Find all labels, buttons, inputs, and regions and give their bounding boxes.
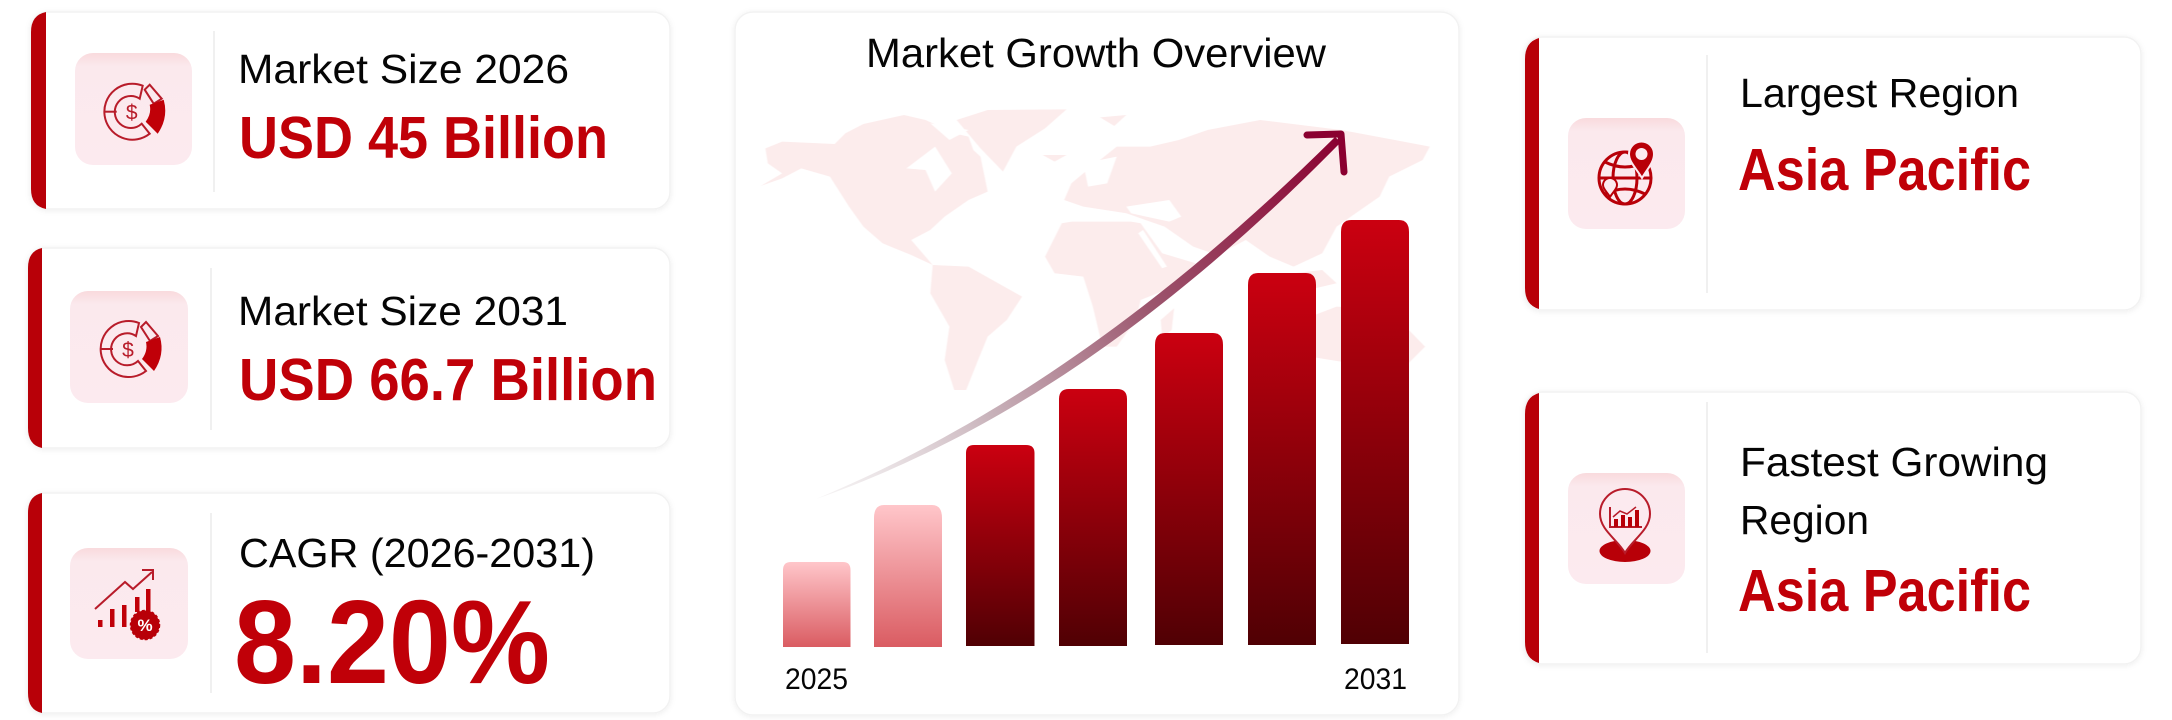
bar 2029 xyxy=(1155,333,1223,645)
panel: fastest growing region xyxy=(1525,392,2141,664)
panel: CAGR xyxy=(28,493,670,713)
bar 2031 xyxy=(1341,220,1409,644)
label: Market Size 2031 xyxy=(238,288,568,334)
value: 8.20% xyxy=(234,576,550,709)
icon: growth chart with percent badge xyxy=(70,548,188,659)
bar 2027 xyxy=(966,445,1034,646)
label: CAGR (2026-2031) xyxy=(239,530,595,576)
world map background xyxy=(761,109,1430,390)
panel background xyxy=(735,12,1459,715)
axis label end: 2031 xyxy=(1344,663,1407,696)
label: Region xyxy=(1740,497,1869,543)
label: Fastest Growing xyxy=(1740,439,2048,485)
bar 2025 xyxy=(783,562,850,647)
red accent bar xyxy=(1525,38,1539,309)
heading: Market Growth Overview xyxy=(866,30,1326,76)
red accent bar xyxy=(28,248,42,448)
panel: market growth overview xyxy=(735,12,1459,715)
value: USD 45 Billion xyxy=(239,105,608,171)
card background xyxy=(1525,37,2141,310)
panel: market size 2026 xyxy=(31,12,670,209)
value: Asia Pacific xyxy=(1738,137,2031,203)
card background xyxy=(31,12,670,209)
red accent bar xyxy=(31,12,46,209)
panel: market size 2031 xyxy=(28,248,670,448)
label xyxy=(1740,439,2048,543)
label: Largest Region xyxy=(1740,70,2019,116)
red accent bar xyxy=(28,493,42,713)
axis label start: 2025 xyxy=(785,663,848,696)
icon: dollar donut chart xyxy=(75,53,192,165)
card background xyxy=(28,248,670,448)
growth arrow xyxy=(816,134,1344,499)
bar 2026 xyxy=(874,505,942,647)
card background xyxy=(28,493,670,713)
bar 2030 xyxy=(1248,273,1316,645)
icon: dollar donut chart: $ xyxy=(126,102,138,125)
card background xyxy=(1525,392,2141,664)
icon: map pin with chart xyxy=(1568,473,1685,584)
value: Asia Pacific xyxy=(1738,558,2031,624)
bar 2028 xyxy=(1059,389,1127,646)
panel: largest region xyxy=(1525,37,2141,310)
red accent bar xyxy=(1525,393,1539,663)
icon: dollar donut chart xyxy=(70,291,188,403)
value: USD 66.7 Billion xyxy=(239,347,657,413)
label: Market Size 2026 xyxy=(238,46,569,92)
bar chart xyxy=(783,220,1409,647)
icon: dollar donut chart: $ xyxy=(122,339,134,362)
icon: globe with pin xyxy=(1568,118,1685,229)
icon: growth chart with percent badge: % xyxy=(137,616,153,635)
